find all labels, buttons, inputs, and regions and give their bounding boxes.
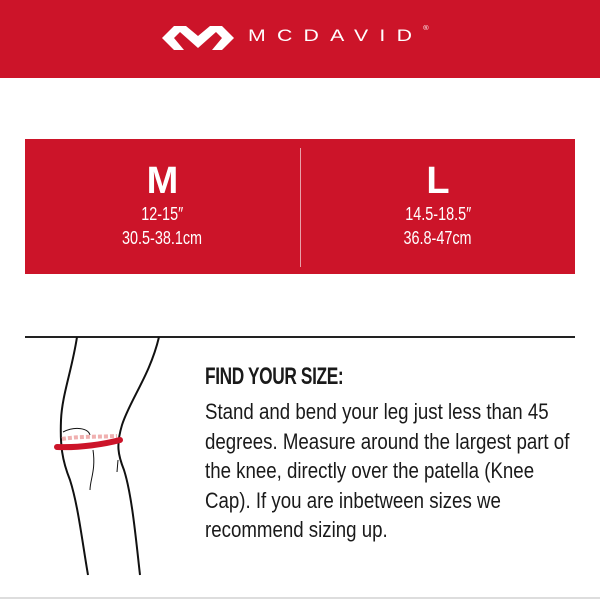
brand name: MCDAVID® [248, 26, 429, 45]
size M: M [147, 160, 178, 202]
header band [0, 0, 600, 78]
size M: 12-15″ [142, 204, 183, 224]
bottom rule [0, 597, 600, 599]
icon: knee with measuring band [54, 337, 160, 576]
instructions: Stand and bend your leg just less than 45 [205, 399, 549, 424]
heading: FIND YOUR SIZE: [205, 363, 343, 390]
instructions: Cap). If you are inbetween sizes we [205, 488, 501, 512]
divider [300, 148, 301, 267]
instructions: recommend sizing up. [205, 517, 388, 542]
size L [404, 160, 472, 248]
size L: 14.5-18.5″ [405, 204, 471, 224]
size L: L [426, 160, 450, 202]
top rule [25, 336, 575, 338]
size M: 30.5-38.1cm [122, 228, 203, 248]
icon: mcdavid emblem [162, 26, 234, 50]
size M [122, 160, 203, 248]
panel: size chart [25, 139, 575, 274]
size L: 36.8-47cm [404, 228, 472, 248]
instructions: degrees. Measure around the largest part of [205, 428, 569, 454]
instructions [205, 399, 570, 542]
text block: find your size [205, 363, 570, 542]
instructions: the knee, directly over the patella (Knee [205, 458, 534, 483]
logo [162, 25, 429, 50]
